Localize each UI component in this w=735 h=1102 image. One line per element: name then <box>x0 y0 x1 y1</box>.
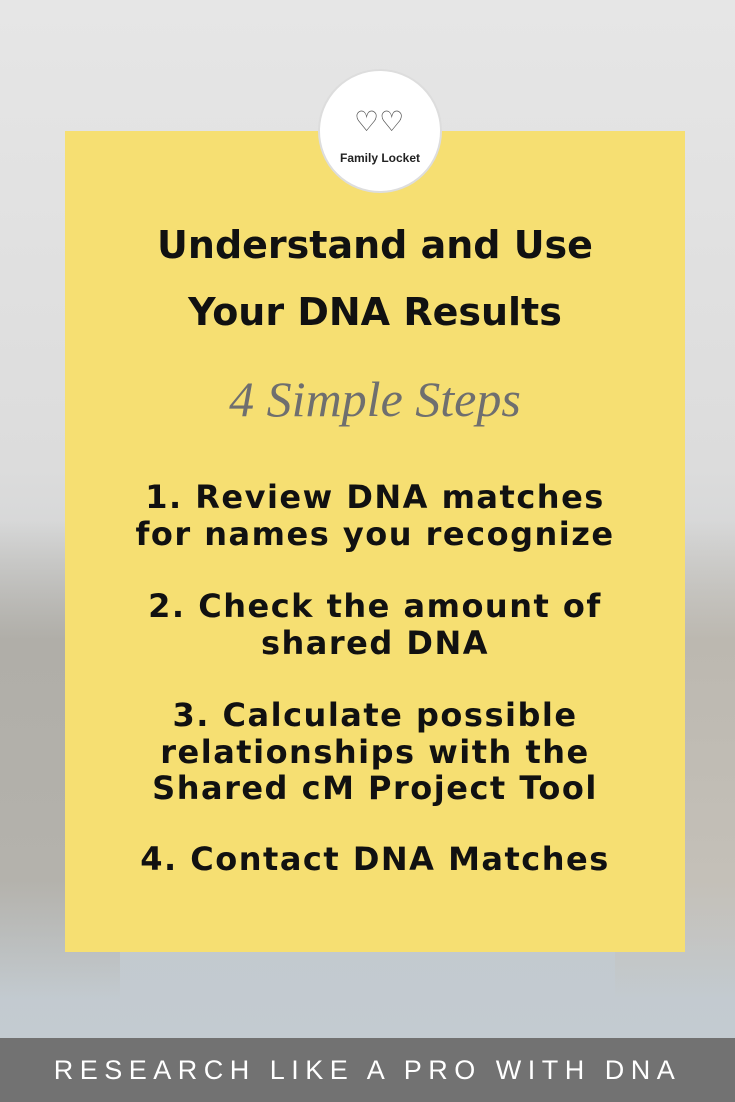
step 1 <box>135 478 615 552</box>
title: Your DNA Results <box>188 290 562 334</box>
background: left trees <box>0 520 120 1000</box>
steps list <box>135 478 615 878</box>
step 2: 2. Check the amount of <box>148 587 602 625</box>
logo <box>318 69 442 193</box>
footer banner: RESEARCH LIKE A PRO WITH DNA <box>54 1055 681 1085</box>
step 3: relationships with the <box>160 732 590 770</box>
step 3 <box>152 696 598 807</box>
subtitle: 4 Simple Steps <box>229 371 521 427</box>
step 1: 1. Review DNA matches <box>145 478 605 516</box>
step 1: for names you recognize <box>135 514 615 552</box>
step 2: shared DNA <box>261 624 489 662</box>
step 3: 3. Calculate possible <box>172 696 578 734</box>
footer banner <box>0 1038 735 1102</box>
step 2 <box>148 587 602 662</box>
yellow panel <box>65 131 685 952</box>
step 4: 4. Contact DNA Matches <box>140 840 610 878</box>
step 3: Shared cM Project Tool <box>152 769 598 807</box>
icon: lockets: ♡♡ <box>354 106 404 137</box>
background: right trees <box>615 520 735 1000</box>
title: Understand and Use <box>157 223 593 267</box>
logo text: Family Locket <box>340 151 420 165</box>
title <box>157 223 593 334</box>
